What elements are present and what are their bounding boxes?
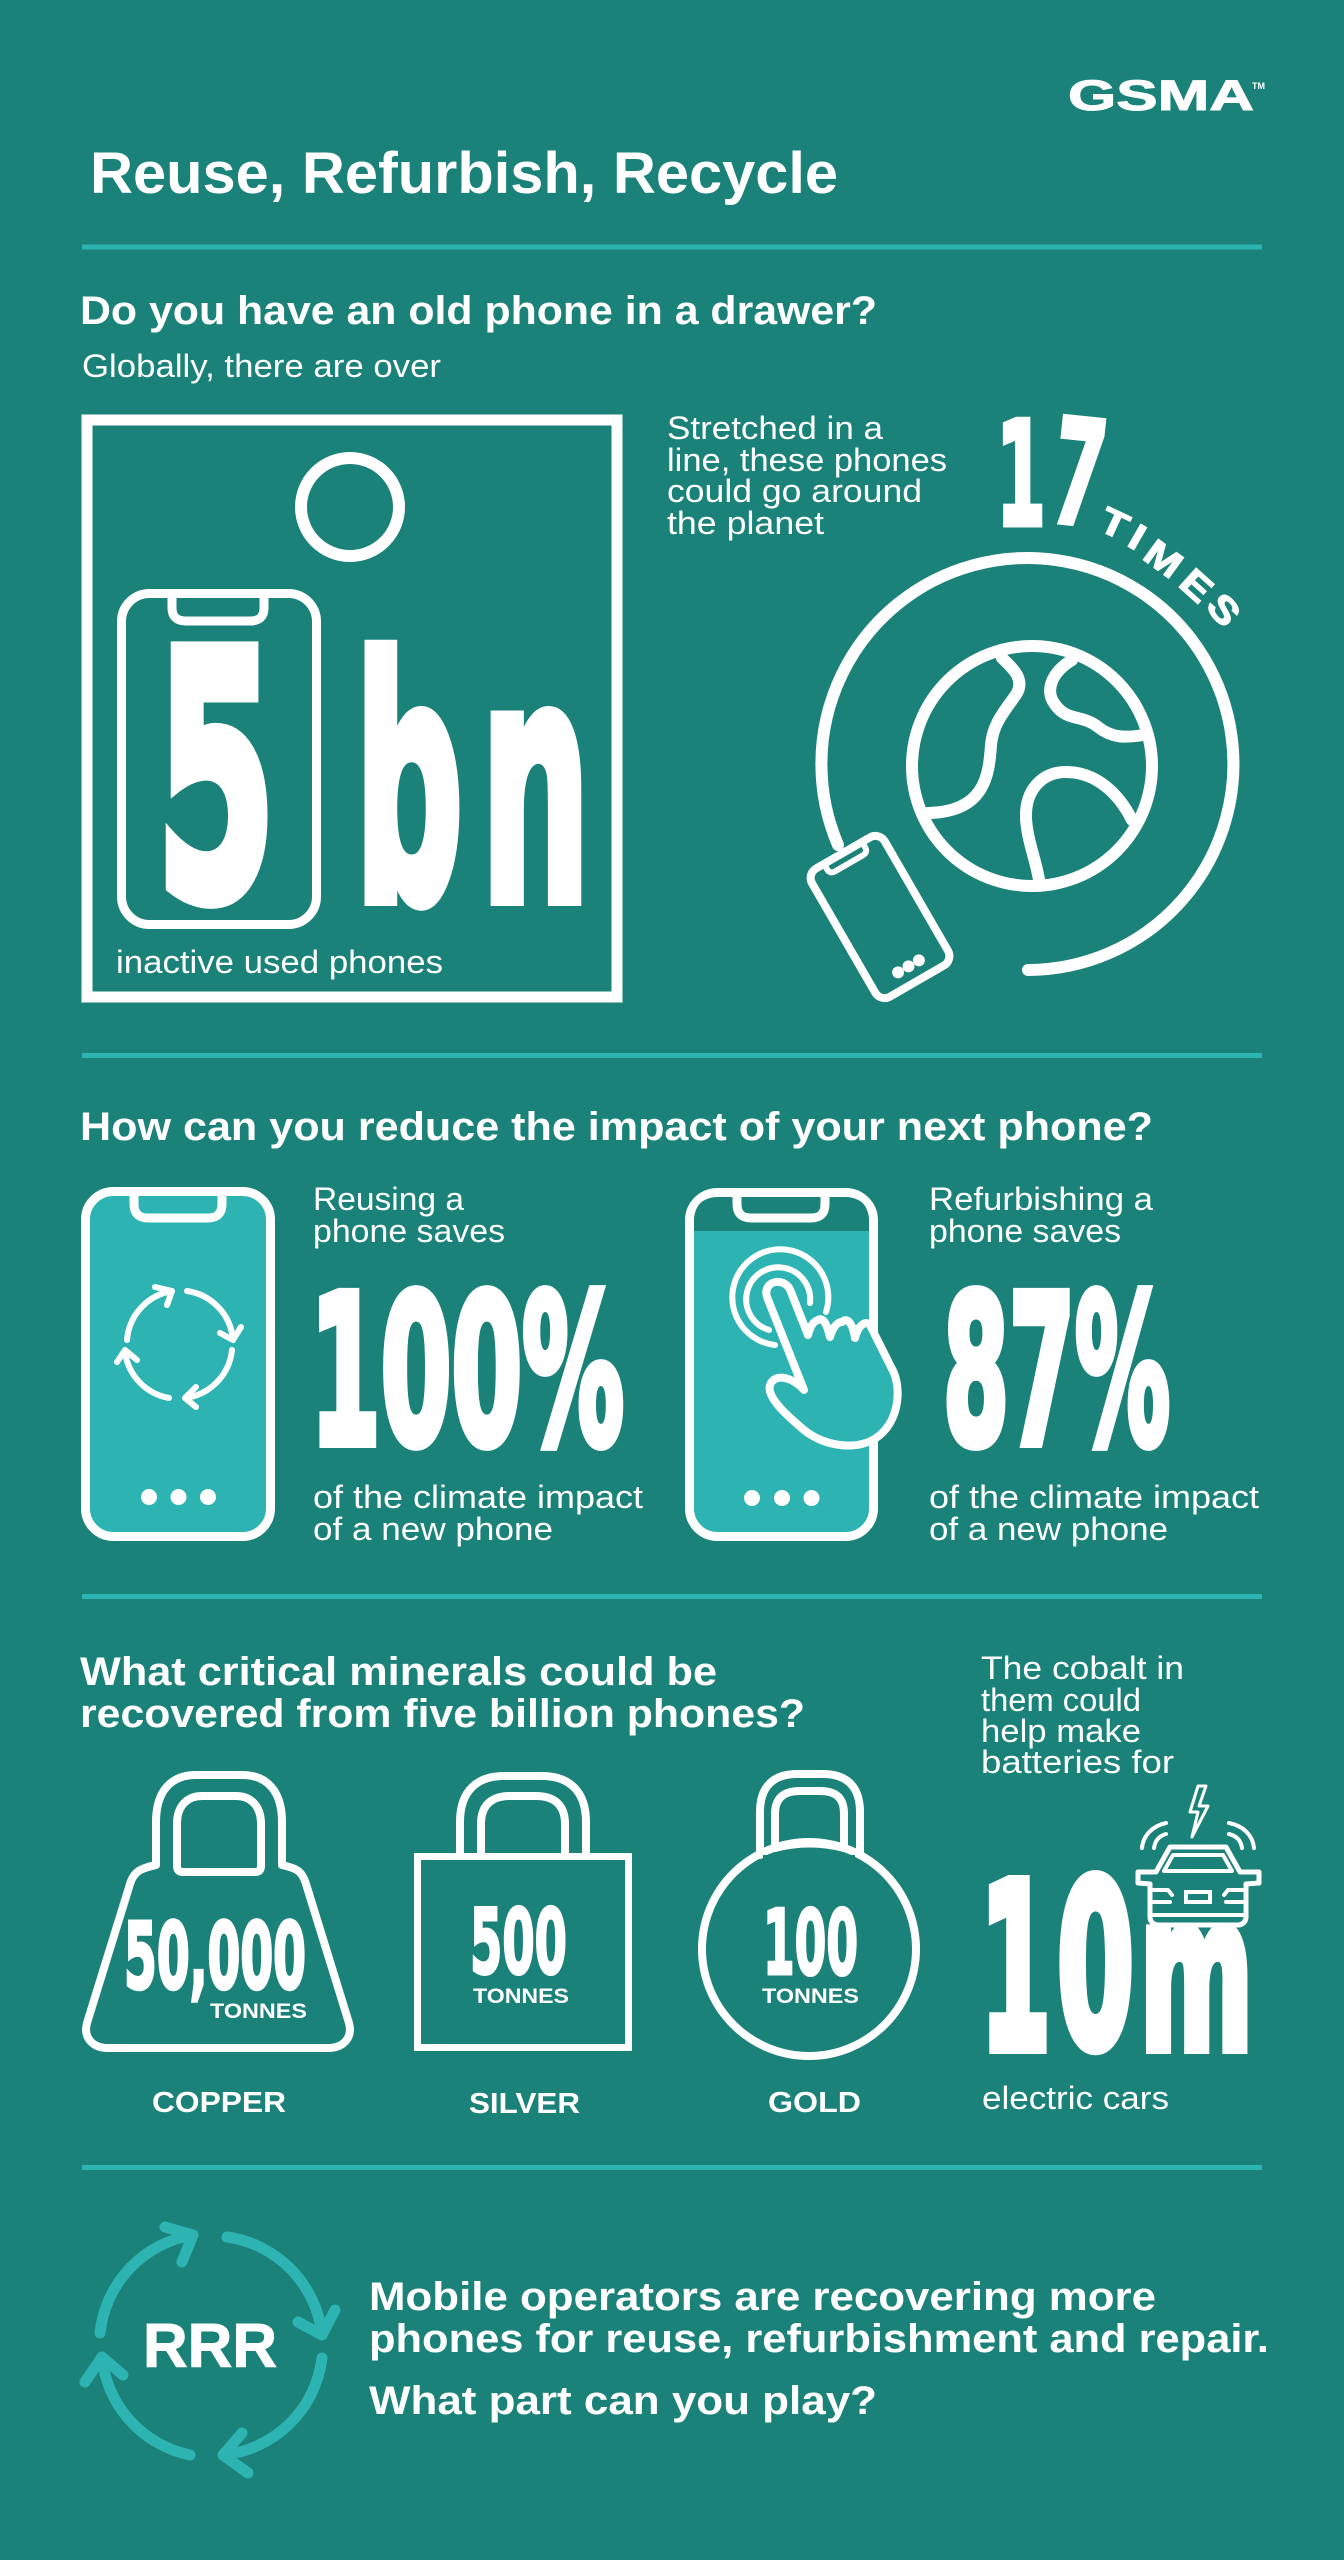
- text: climate impact: of a new phone: [313, 1511, 553, 1547]
- label: TIMES on curve: M: [1136, 531, 1191, 586]
- heading: old phone: Do you have an old phone in a drawer?: [80, 289, 877, 333]
- text: stretched in a line: Stretched in a: [667, 410, 883, 446]
- weight: gold: GOLD: [768, 2087, 861, 2119]
- text: call to action: Mobile operators are recovering more: [369, 2275, 1156, 2319]
- big number: 10m: 1: [980, 1836, 1051, 2103]
- text: climate impact refurb: [929, 1479, 1259, 1547]
- text: reusing a phone saves: Reusing a: [313, 1181, 464, 1217]
- panel: call to action: [85, 2227, 1269, 2473]
- weight: silver: TONNES: [473, 1985, 569, 2008]
- text: climate impact refurb: of a new phone: [929, 1511, 1168, 1547]
- stat box: 5bn inactive phones: [87, 420, 617, 997]
- heading: critical minerals: recovered from five billion phones?: [80, 1692, 805, 1736]
- weight: gold: TONNES: [762, 1985, 859, 2008]
- big number: 5bn: [156, 581, 590, 978]
- big number: 10m: 0: [1057, 1834, 1134, 2101]
- label: inactive used phones: inactive used phones: [116, 944, 443, 980]
- intro text: Globally, there are over: [82, 348, 441, 384]
- panel: reduce the impact: 100%: [310, 1252, 624, 1492]
- text: cobalt: help make: [981, 1713, 1141, 1749]
- weight: silver: 500: [470, 1890, 567, 1995]
- text: stretched in a line: could go around: [667, 473, 922, 509]
- icon: RRR cycle: RRR: [143, 2312, 277, 2381]
- text: reusing a phone saves: [313, 1181, 505, 1249]
- logo: GSMA: GSMA: [1068, 72, 1254, 120]
- weight: silver: SILVER: [469, 2088, 580, 2120]
- icon: phone line circling the globe: [807, 558, 1233, 1002]
- stat box: 5bn inactive phones: n: [481, 592, 590, 978]
- weight: gold: 100: [763, 1891, 858, 1996]
- logo: GSMA: [1068, 72, 1265, 120]
- panel: old phones in drawers: [80, 289, 1249, 1002]
- big number: 5bn: 5: [156, 581, 276, 978]
- text: cobalt: [981, 1650, 1184, 1780]
- text: call to action: phones for reuse, refurbishment and repair.: [369, 2317, 1269, 2361]
- text: refurbishing a phone saves: phone saves: [929, 1213, 1121, 1249]
- icon: phone with tapping hand: [690, 1192, 898, 1536]
- text: cobalt: The cobalt in: [981, 1650, 1184, 1686]
- weight: silver: [418, 1776, 628, 2120]
- weight: copper: [86, 1775, 350, 2119]
- text: stretched in a line: line, these phones: [667, 442, 947, 478]
- big number: 17: 1: [996, 391, 1046, 560]
- text: reusing a phone saves: phone saves: [313, 1213, 505, 1249]
- text: stretched in a line: [667, 410, 947, 541]
- icon: globe: [912, 646, 1152, 886]
- label: electric cars: electric cars: [982, 2080, 1169, 2116]
- label: TIMES on curve: I: [1122, 516, 1153, 558]
- text: stretched in a line: the planet: [667, 505, 824, 541]
- heading: reduce impact: How can you reduce the impact of your next phone?: [80, 1105, 1153, 1149]
- text: call to action: What part can you play?: [369, 2379, 877, 2423]
- icon: RRR cycle: [85, 2227, 335, 2473]
- label: TIMES on curve: E: [1172, 560, 1221, 611]
- text: call to action: [369, 2275, 1269, 2423]
- big number: 17: 7: [1044, 388, 1114, 561]
- weight: copper: TONNES: [210, 2000, 307, 2023]
- big number: 10m: [980, 1834, 1253, 2103]
- logo: GSMA: TM: [1252, 81, 1265, 91]
- icon: phone with cycle arrows: [86, 1192, 270, 1536]
- big number: 5bn: b: [355, 592, 463, 978]
- icon: phone outline: [122, 594, 316, 924]
- panel: critical minerals: [80, 1650, 1259, 2120]
- text: climate impact: of the climate impact: [313, 1479, 643, 1515]
- text: cobalt: batteries for: [981, 1744, 1174, 1780]
- text: cobalt: them could: [981, 1682, 1141, 1718]
- icon: tapping hand: [732, 1249, 898, 1446]
- weight: copper: 50,000: [124, 1903, 306, 2010]
- heading: critical minerals: What critical minerals could be: [80, 1650, 717, 1694]
- icon: electric car: [1138, 1786, 1259, 1925]
- text: climate impact refurb: of the climate impact: [929, 1479, 1259, 1515]
- weight: copper: COPPER: [152, 2087, 286, 2119]
- text: refurbishing a phone saves: [929, 1181, 1153, 1249]
- text: climate impact: [313, 1479, 643, 1547]
- label: TIMES on curve: S: [1198, 585, 1249, 635]
- panel: reduce the impact: [80, 1105, 1259, 1547]
- label: TIMES on curve: [1093, 499, 1249, 635]
- heading: critical minerals: [80, 1650, 805, 1736]
- icon: camera circle: [301, 458, 399, 556]
- label: TIMES on curve: T: [1093, 499, 1135, 548]
- text: refurbishing a phone saves: Refurbishing a: [929, 1181, 1153, 1217]
- icon: tilted phone: [807, 832, 953, 1002]
- weight: gold: [702, 1774, 916, 2119]
- title: Reuse, Refurbish, Recycle: [90, 141, 838, 206]
